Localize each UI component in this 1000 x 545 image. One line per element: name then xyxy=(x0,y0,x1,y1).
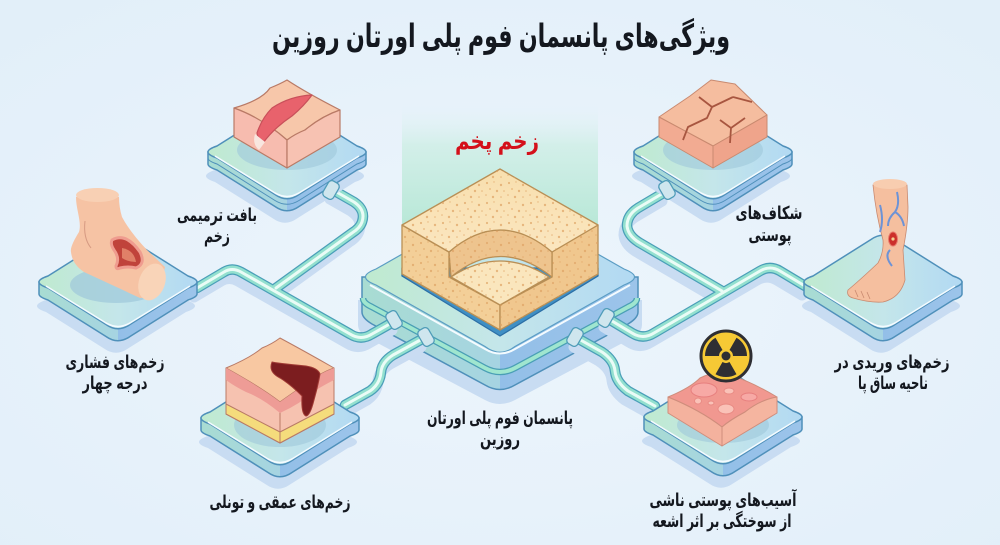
heading: central dressing label xyxy=(427,408,573,450)
icon: pipe connectors xyxy=(384,307,616,348)
heading: pressure ulcer label xyxy=(66,352,164,394)
heading: radiation damage label xyxy=(650,488,797,532)
heading: deep wound label: زخم‌های عمقی و تونلی xyxy=(210,492,350,513)
heading: skin fissures label: شکاف‌های xyxy=(736,203,802,223)
icon: granulation tissue block xyxy=(234,80,340,168)
icon: foot with pressure wound xyxy=(71,188,171,304)
heading: skin fissures label: پوستی xyxy=(748,225,792,246)
heading: pressure ulcer label: زخم‌های فشاری xyxy=(66,352,164,372)
heading: radiation damage label: آسیب‌های پوستی ناشی xyxy=(650,488,797,511)
panel: central platform xyxy=(358,202,642,404)
heading: healing tissue label: زخم xyxy=(204,226,230,246)
foam top face xyxy=(402,169,598,252)
icon: connector for skin fissures xyxy=(657,179,677,201)
heading: pressure ulcer label: درجه چهار xyxy=(82,373,148,394)
heading: venous ulcer label: ناحیه ساق پا xyxy=(858,373,928,394)
icon: deep wound block xyxy=(226,338,334,443)
icon: leg with venous ulcer xyxy=(848,179,908,302)
panel: skin fissures xyxy=(632,80,792,223)
icon: radiation sign xyxy=(701,331,751,381)
panel: pressure ulcer xyxy=(37,188,197,353)
arrow: connecting pipes xyxy=(194,190,805,415)
heading: venous ulcer label xyxy=(834,352,950,394)
foam cavity floor xyxy=(451,261,549,305)
title: ویژگی‌های پانسمان فوم پلی اورتان روزین xyxy=(272,17,730,55)
foam right face xyxy=(500,225,598,330)
icon: connector for healing tissue xyxy=(321,179,341,201)
panel: central foam glow xyxy=(402,100,598,280)
foam left face xyxy=(402,225,500,330)
heading: venous ulcer label: زخم‌های وریدی در xyxy=(834,352,950,373)
heading: healing tissue label: بافت ترمیمی xyxy=(177,205,257,226)
icon: polyurethane foam block xyxy=(402,169,598,336)
panel: radiation skin damage xyxy=(642,331,802,488)
heading: healing tissue label xyxy=(177,205,257,246)
icon: cracked skin block xyxy=(659,80,767,168)
icon: burned skin block xyxy=(668,373,777,446)
panel: healing tissue xyxy=(206,80,366,223)
logo: brand mark: زخم پخم xyxy=(455,128,539,155)
panel: venous ulcer xyxy=(802,179,962,353)
heading: radiation damage label: از سوختگی بر اثر اشعه xyxy=(652,510,792,532)
panel: deep and tunneling wound xyxy=(199,338,359,489)
foam cavity wall xyxy=(449,230,552,277)
heading: skin fissures label xyxy=(736,203,802,246)
heading: central dressing label: پانسمان فوم پلی اورتان xyxy=(427,408,573,429)
foam blue backing xyxy=(402,268,598,336)
heading: central dressing label: روزین xyxy=(480,429,520,450)
